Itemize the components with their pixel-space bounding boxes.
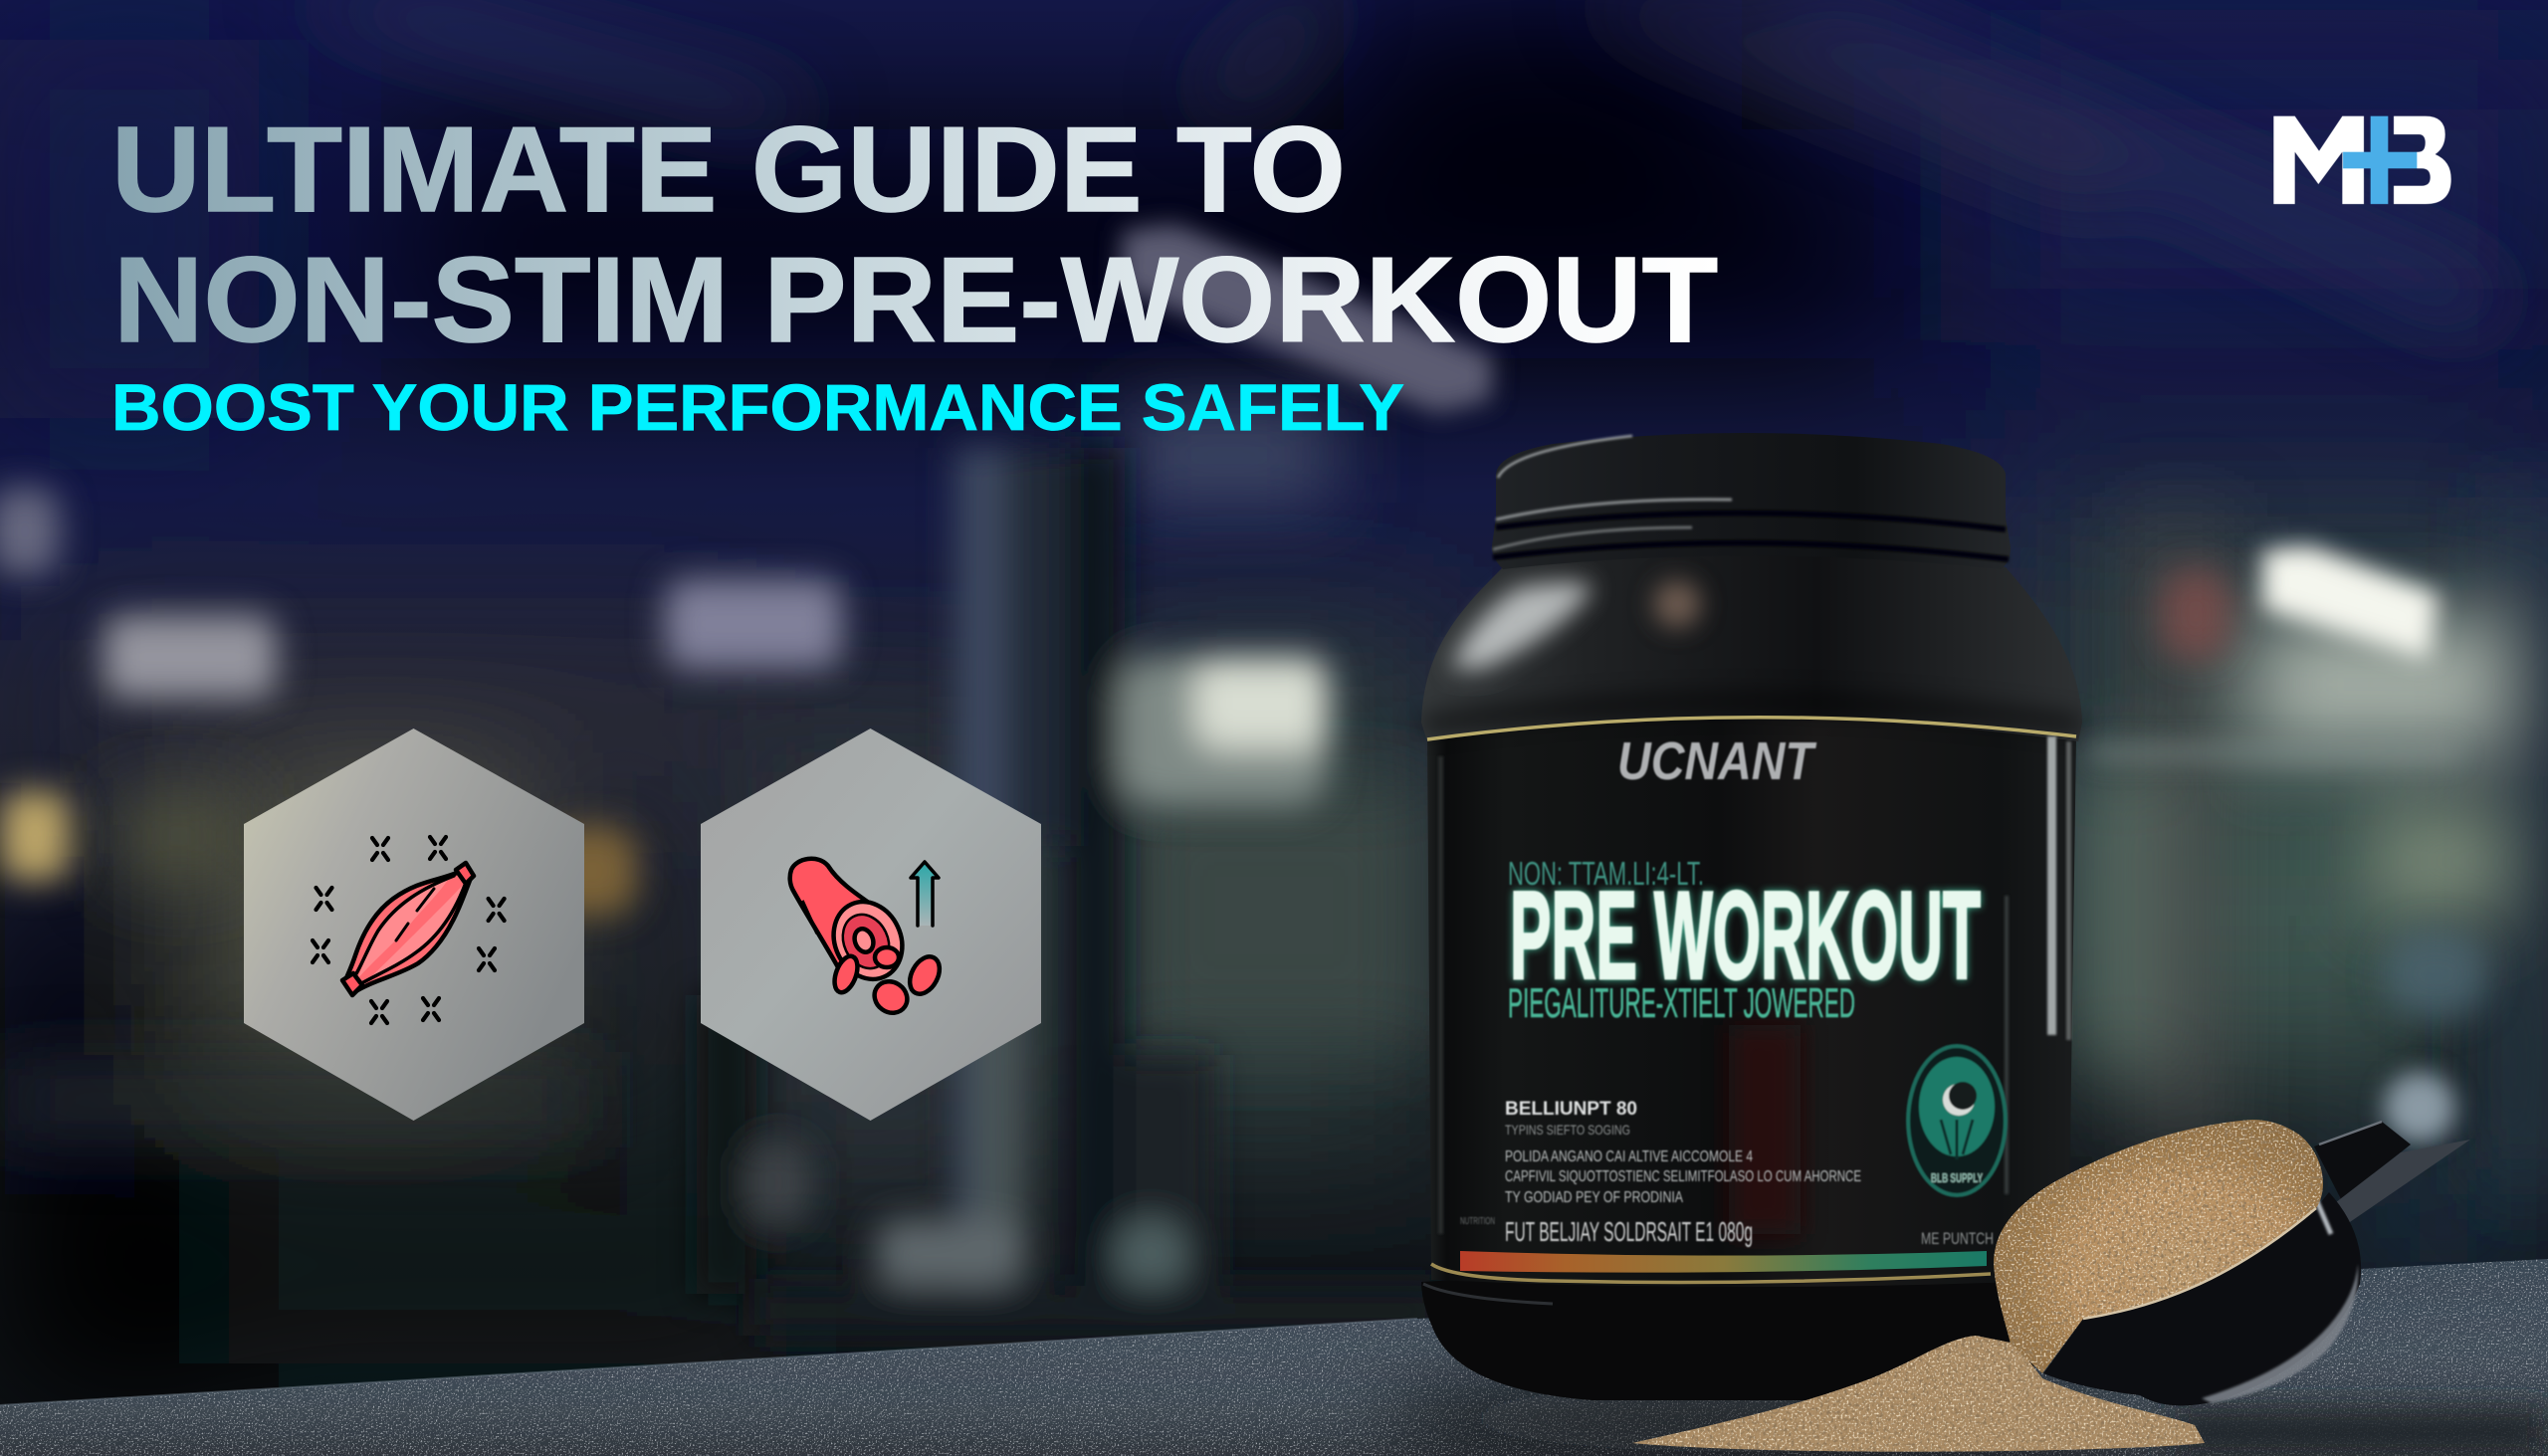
jar badge: BLB SUPPLY <box>1931 1170 1983 1185</box>
hexagon: blood flow icon <box>701 728 1041 1121</box>
scoop body <box>2043 1192 2361 1405</box>
jar badge <box>1908 1046 2006 1195</box>
jar brand: UCNANT <box>1617 731 1816 791</box>
icon: up arrow <box>911 862 939 926</box>
jar lid <box>1492 433 2011 569</box>
measuring scoop <box>1994 1120 2470 1405</box>
heading line 2: NON-STIM PRE-WORKOUT <box>113 232 1718 367</box>
scoop handle <box>2314 1122 2411 1199</box>
jar fine print: NUTRITION <box>1460 1216 1495 1227</box>
jar highlights <box>1438 736 2071 1234</box>
gold rim line <box>1427 718 2076 739</box>
jar fine print: TY GODIAD PEY OF PRODINIA <box>1505 1189 1683 1206</box>
table surface <box>0 1259 2548 1456</box>
hexagon: muscle recovery icon <box>244 728 584 1121</box>
jar fine print: TYPINS SIEFTO SOGING <box>1505 1122 1630 1138</box>
icon: muscle <box>342 863 474 995</box>
jar fine print <box>1460 1099 1994 1248</box>
jar fine print: ME PUNTCH <box>1921 1229 1994 1248</box>
jar color band <box>1460 1251 1987 1273</box>
scoop metallic highlight <box>2202 1264 2358 1403</box>
product: supplement jar: PRE WORKOUT <box>1510 867 1981 1005</box>
jar fine print: BELLIUNPT 80 <box>1505 1099 1637 1120</box>
jar fine print: FUT BELJIAY SOLDRSAIT E1 080g <box>1505 1216 1753 1247</box>
jar tagline: PIEGALITURE-XTIELT JOWERED <box>1508 979 1855 1026</box>
product: supplement jar <box>1421 433 2082 1400</box>
powder pile <box>1632 1336 2205 1452</box>
jar shoulder <box>1421 552 2082 741</box>
icon: sparkle marks <box>313 837 505 1023</box>
jar lower gold line <box>1431 1264 1991 1282</box>
title <box>111 102 1718 444</box>
subtitle: BOOST YOUR PERFORMANCE SAFELY <box>111 370 1404 444</box>
heading line 1: ULTIMATE GUIDE TO <box>111 102 1346 237</box>
jar body <box>1427 718 2076 1287</box>
jar small teal line: NON: TTAM.LI:4-LT. <box>1508 855 1704 892</box>
logo: M+B <box>2273 116 2451 204</box>
jar fine print: CAPFIVIL SIQUOTTOSTIENC SELIMITFOLASO LO CUM AHORNCE <box>1505 1168 1861 1185</box>
scoop powder <box>1994 1120 2323 1373</box>
icon: blood vessel with cells <box>790 859 946 1019</box>
jar base <box>1421 1273 2068 1400</box>
jar fine print: POLIDA ANGANO CAI ALTIVE AICCOMOLE 4 <box>1505 1148 1753 1165</box>
